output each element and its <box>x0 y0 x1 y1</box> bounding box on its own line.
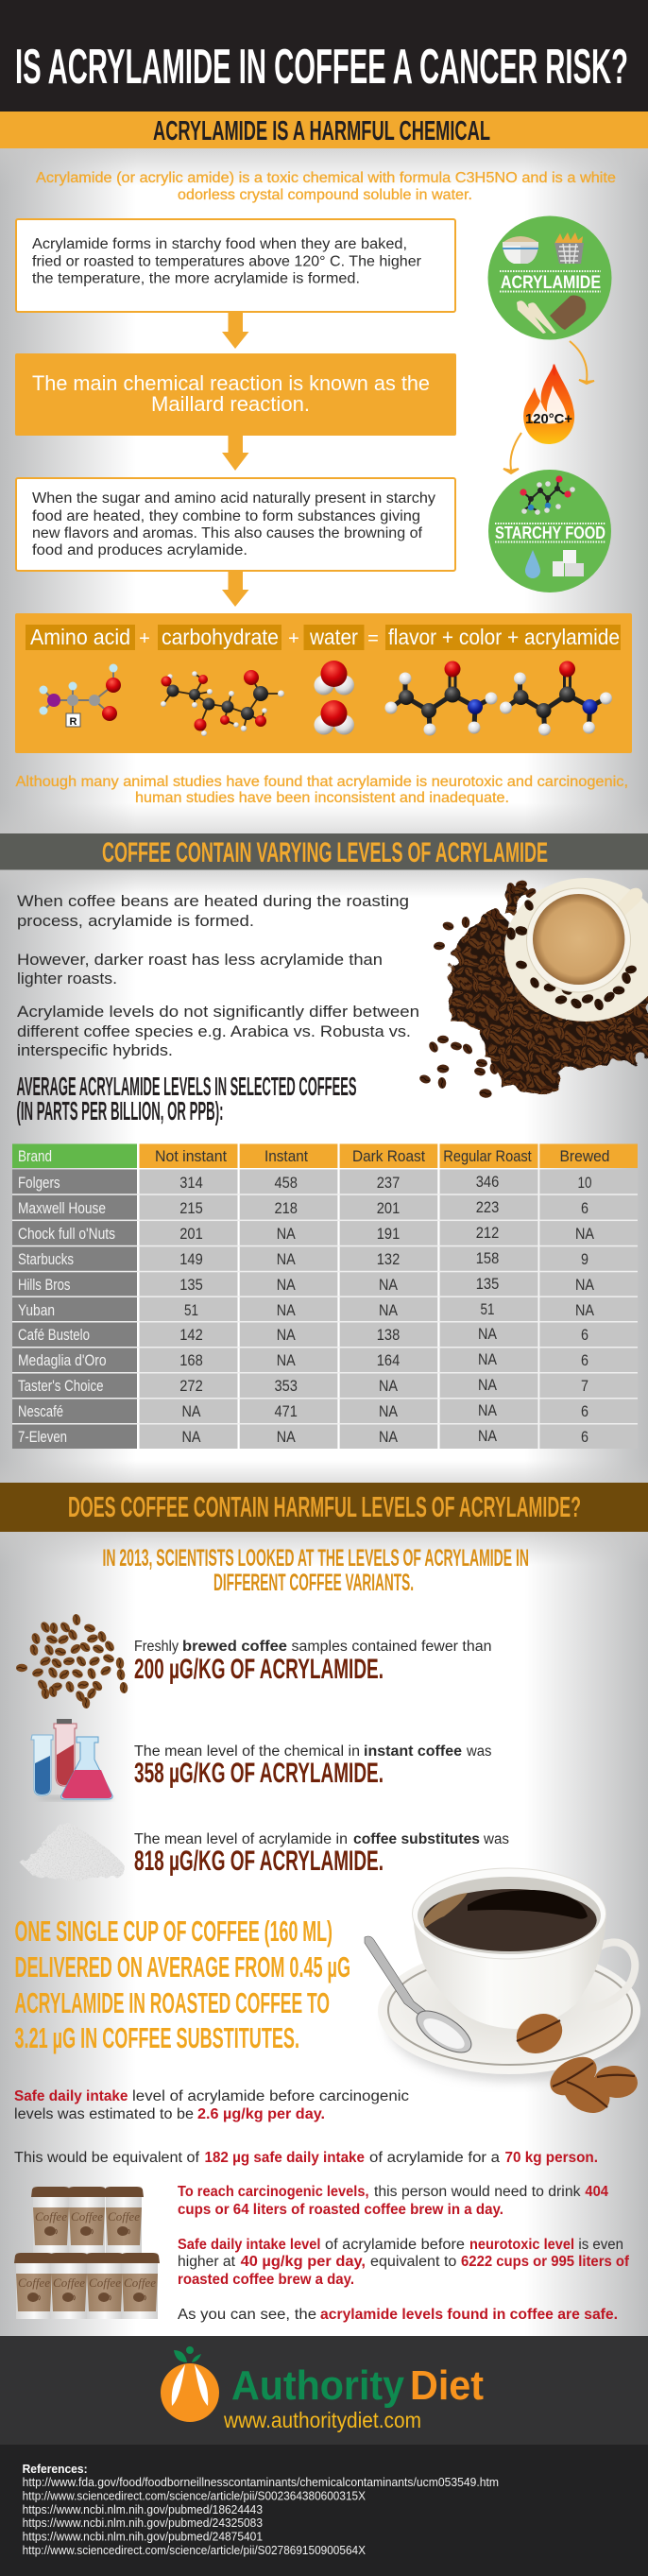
text box: how acrylamide forms: the temperature, the more acrylamide is formed. <box>32 270 360 287</box>
text: neurotoxic level: neurotoxic level <box>469 2237 574 2253</box>
subheading: 2013 study <box>102 1545 529 1596</box>
text: equivalent intake: of acrylamide for a <box>369 2150 500 2166</box>
row: Taster's Choice: NA <box>478 1376 498 1394</box>
text box: sugar and amino acid <box>16 478 455 571</box>
row: Starbucks: 132 <box>377 1250 400 1268</box>
callout: one cup of coffee: ONE SINGLE CUP OF COFFEE (160 ML) <box>15 1915 333 1948</box>
equation labels: + <box>139 628 150 649</box>
table header row: Brewed <box>559 1147 610 1165</box>
text: coffee substitutes stat <box>134 1831 509 1877</box>
label: acrylamide: ACRYLAMIDE <box>501 273 601 293</box>
row: Folgers: 346 <box>476 1173 499 1191</box>
text: coffee substitutes stat: coffee substitutes <box>353 1831 480 1847</box>
row: Nescafé: NA <box>181 1402 201 1420</box>
row: Taster's Choice: 353 <box>274 1377 298 1395</box>
row: Yuban: 51 <box>184 1301 198 1319</box>
row: Medaglia d'Oro <box>18 1350 588 1369</box>
text box: sugar and amino acid: new flavors and aromas. This also causes the browning of <box>32 525 423 541</box>
row: Hills Bros: 135 <box>476 1275 499 1293</box>
text block: roasting facts: interspecific hybrids. <box>17 1041 173 1059</box>
text: conclusion <box>178 2307 618 2323</box>
row: Maxwell House: 218 <box>274 1199 298 1217</box>
text: carcinogenic levels: this person would need to drink <box>374 2184 581 2200</box>
callout: one cup of coffee: ACRYLAMIDE IN ROASTED COFFEE TO <box>15 1986 330 2019</box>
text block: roasting facts: process, acrylamide is formed. <box>17 912 254 930</box>
row: 7-Eleven <box>18 1427 588 1446</box>
row: Medaglia d'Oro: NA <box>478 1350 498 1368</box>
row: Starbucks: 9 <box>581 1250 588 1268</box>
text box: sugar and amino acid: When the sugar and amino acid naturally present in starchy <box>32 490 435 507</box>
row: Maxwell House: 201 <box>377 1199 400 1217</box>
text: instant coffee stat: instant coffee <box>364 1743 462 1760</box>
row: Nescafé <box>18 1401 588 1420</box>
table header row: Instant <box>264 1147 308 1165</box>
section heading: acrylamide is a harmful chemical <box>0 112 648 148</box>
row: Medaglia d'Oro: NA <box>277 1351 296 1369</box>
text: safe daily intake <box>14 2088 409 2122</box>
icon: small molecule <box>520 475 575 515</box>
row: Maxwell House: 6 <box>581 1199 588 1217</box>
row: Medaglia d'Oro: 6 <box>581 1351 588 1369</box>
image: test tubes and flask <box>31 1719 113 1801</box>
closing note: animal and human studies <box>15 774 628 806</box>
molecule: amino acid <box>40 663 121 728</box>
row: Chock full o'Nuts: Chock full o'Nuts <box>18 1226 115 1243</box>
icon: bowl <box>503 236 538 264</box>
text: neurotoxic level: 40 µg/kg per day, <box>241 2254 366 2270</box>
text box: how acrylamide forms: fried or roasted to temperatures above 120° C. The higher <box>32 253 421 270</box>
text: brewed coffee stat <box>134 1639 491 1685</box>
molecule: water <box>314 661 354 735</box>
text block: roasting facts <box>17 892 419 1059</box>
row: Yuban: Yuban <box>18 1302 55 1319</box>
arrow down 1 <box>222 313 249 349</box>
text: neurotoxic level <box>178 2237 630 2288</box>
row: Hills Bros: 135 <box>179 1276 203 1294</box>
row: 7-Eleven: NA <box>277 1428 296 1446</box>
table header row: Brand <box>18 1148 52 1165</box>
footer: references: https://www.ncbi.nlm.nih.gov/pubmed/24325083 <box>23 2516 263 2530</box>
text: equivalent intake <box>14 2150 598 2166</box>
arrow: acrylamide to heat <box>570 341 594 384</box>
footer: logo band <box>0 2336 648 2445</box>
image: coffee bean cluster <box>16 1613 128 1709</box>
text: instant coffee stat: 358 µG/KG OF ACRYLAMIDE. <box>134 1758 384 1789</box>
row: Nescafé: 471 <box>274 1402 298 1420</box>
equation labels: flavor + color + acrylamide <box>388 625 620 649</box>
text: neurotoxic level: 6222 cups or 995 liters of <box>461 2254 630 2270</box>
text: brewed coffee stat: 200 µG/KG OF ACRYLAMIDE. <box>134 1654 384 1685</box>
row: Chock full o'Nuts: NA <box>575 1225 595 1243</box>
panel: Maillard reaction: The main chemical reaction is known as the <box>32 371 430 395</box>
table header row: Not instant <box>155 1147 227 1165</box>
text: instant coffee stat <box>134 1743 492 1789</box>
closing note: animal and human studies: human studies have been inconsistent and inadequate. <box>135 790 509 806</box>
row: Medaglia d'Oro: 168 <box>179 1351 203 1369</box>
footer: references <box>0 2445 648 2576</box>
row: Folgers: Folgers <box>18 1175 60 1192</box>
section heading: harmful levels <box>0 1483 648 1532</box>
text block: roasting facts: Acrylamide levels do not significantly differ between <box>17 1003 419 1021</box>
row: Chock full o'Nuts: NA <box>277 1225 296 1243</box>
footer: references: References: <box>23 2462 88 2476</box>
row: Folgers: 314 <box>179 1174 203 1192</box>
text box: sugar and amino acid: food and produces acrylamide. <box>32 542 247 558</box>
intro text: Acrylamide (or acrylic amide) is a toxic chemical with formula C3H5NO and is a white <box>36 170 616 186</box>
text block: roasting facts: lighter roasts. <box>17 970 117 987</box>
row: Taster's Choice: Taster's Choice <box>18 1378 104 1395</box>
text: neurotoxic level: of acrylamide before <box>325 2237 465 2253</box>
row: Café Bustelo: 138 <box>377 1326 400 1344</box>
text block: roasting facts: However, darker roast has less acrylamide than <box>17 951 383 969</box>
table: acrylamide levels by brand <box>12 1143 638 1449</box>
row: 7-Eleven: NA <box>181 1428 201 1446</box>
icon: fries <box>554 232 584 264</box>
intro text: odorless crystal compound soluble in water. <box>178 187 472 203</box>
equation labels: Amino acid <box>30 625 130 649</box>
callout: one cup of coffee <box>15 1915 350 2054</box>
row: Yuban: 51 <box>480 1300 495 1318</box>
icon: sugar cubes <box>553 550 584 576</box>
row: Café Bustelo: 142 <box>179 1326 203 1344</box>
molecule: amino acid: R <box>70 716 77 728</box>
row: 7-Eleven: 6 <box>581 1428 588 1446</box>
text: safe daily intake: Safe daily intake <box>14 2088 128 2104</box>
table header row: Dark Roast <box>352 1147 425 1165</box>
panel: reaction equation <box>15 613 632 753</box>
icon: flame 120C: 120°C+ <box>525 411 572 427</box>
row: Starbucks <box>18 1249 588 1268</box>
image: cup of black coffee with spoon and beans <box>365 1868 641 2121</box>
icon: starchy food circle <box>488 470 611 592</box>
row: Yuban: NA <box>575 1301 595 1319</box>
molecule: acrylamide left <box>385 661 497 735</box>
equation labels: water <box>309 625 358 649</box>
row: Café Bustelo: NA <box>478 1325 498 1343</box>
arrow down 2 <box>222 436 249 471</box>
row: Starbucks: NA <box>277 1250 296 1268</box>
row: Café Bustelo <box>18 1325 588 1344</box>
closing note: animal and human studies: Although many animal studies have found that acrylamide is neurotoxic and carcinogenic, <box>15 774 628 790</box>
row: Folgers: 237 <box>377 1174 400 1192</box>
table heading <box>17 1072 357 1125</box>
row: Taster's Choice: 7 <box>581 1377 588 1395</box>
text: conclusion: As you can see, the <box>178 2307 316 2323</box>
table header row: Regular Roast <box>443 1147 532 1165</box>
icon: orange logo <box>161 2346 219 2422</box>
label: starchy food: STARCHY FOOD <box>495 524 605 542</box>
text: carcinogenic levels: cups or 64 liters of roasted coffee brew in a day. <box>178 2202 503 2218</box>
row: Yuban: NA <box>379 1301 399 1319</box>
table heading: (IN PARTS PER BILLION, OR PPB): <box>17 1096 223 1125</box>
panel: Maillard reaction: Maillard reaction. <box>151 392 310 416</box>
equation labels: carbohydrate <box>162 625 279 649</box>
callout: one cup of coffee: 3.21 µG IN COFFEE SUBSTITUTES. <box>15 2021 299 2054</box>
text: equivalent intake: 182 µg safe daily intake <box>204 2150 365 2166</box>
row: Medaglia d'Oro: 164 <box>377 1351 400 1369</box>
row: Maxwell House: 223 <box>476 1198 499 1216</box>
equation labels: + <box>288 628 299 649</box>
equation labels: = <box>367 628 379 649</box>
text box: how acrylamide forms: Acrylamide forms in starchy food when they are baked, <box>32 236 407 252</box>
footer: references: http://www.sciencedirect.com/science/article/pii/S002364380600315X <box>23 2489 367 2502</box>
intro text <box>36 170 616 203</box>
icon: flame 120C <box>523 364 574 444</box>
row: Medaglia d'Oro: Medaglia d'Oro <box>18 1352 107 1369</box>
row: Café Bustelo: 6 <box>581 1326 588 1344</box>
row: Chock full o'Nuts: 201 <box>179 1225 203 1243</box>
text block: roasting facts: When coffee beans are heated during the roasting <box>17 892 409 910</box>
text: safe daily intake: levels was estimated to be <box>14 2106 194 2122</box>
text block: roasting facts: different coffee species e.g. Arabica vs. Robusta vs. <box>17 1022 411 1040</box>
row: Starbucks: 149 <box>179 1250 203 1268</box>
image: coffee cup and beans <box>418 878 648 1098</box>
row: Nescafé: NA <box>379 1402 399 1420</box>
icon: acrylamide circle <box>487 215 612 340</box>
text: neurotoxic level: roasted coffee brew a day. <box>178 2272 354 2288</box>
text: coffee substitutes stat: was <box>483 1831 509 1847</box>
row: Hills Bros <box>18 1275 595 1294</box>
image: stacked coffee cups <box>14 2187 160 2319</box>
subheading: 2013 study: DIFFERENT COFFEE VARIANTS. <box>213 1570 414 1596</box>
row: Yuban <box>18 1300 595 1319</box>
text: coffee substitutes stat: The mean level of acrylamide in <box>134 1831 348 1847</box>
image: powder pile <box>21 1823 126 1880</box>
text: safe daily intake: level of acrylamide before carcinogenic <box>132 2088 409 2104</box>
panel: Maillard reaction <box>15 353 456 436</box>
text: neurotoxic level: Safe daily intake level <box>178 2237 321 2253</box>
icon: parsnips <box>517 301 556 334</box>
row: Chock full o'Nuts <box>18 1224 595 1243</box>
row: Hills Bros: NA <box>575 1276 595 1294</box>
row: Folgers: 10 <box>578 1174 591 1192</box>
row: Hills Bros: NA <box>379 1276 399 1294</box>
text box: sugar and amino acid: food are heated, they combine to form substances giving <box>32 508 420 524</box>
footer: references: https://www.ncbi.nlm.nih.gov/pubmed/18624443 <box>23 2503 263 2516</box>
text: coffee substitutes stat: 818 µG/KG OF ACRYLAMIDE. <box>134 1846 384 1877</box>
equation labels <box>26 625 621 650</box>
row: Starbucks: 158 <box>476 1249 499 1267</box>
row: Nescafé: Nescafé <box>18 1403 63 1420</box>
molecule: carbohydrate <box>161 670 284 736</box>
row: Chock full o'Nuts: 191 <box>377 1225 400 1243</box>
row: Starbucks: Starbucks <box>18 1251 74 1268</box>
row: Folgers: 458 <box>274 1174 298 1192</box>
text: carcinogenic levels: To reach carcinogenic levels, <box>178 2184 368 2200</box>
text: brewed coffee stat: Freshly <box>134 1639 179 1655</box>
text box: how acrylamide forms <box>16 219 455 312</box>
text: equivalent intake: This would be equivalent of <box>14 2150 200 2166</box>
row: Maxwell House <box>18 1198 588 1217</box>
arrow down 3 <box>222 572 249 607</box>
website url: www.authoritydiet.com <box>223 2408 421 2432</box>
icon: water drop <box>525 550 540 578</box>
text: neurotoxic level: is even <box>578 2237 623 2253</box>
row: Taster's Choice: 272 <box>179 1377 203 1395</box>
footer: references: https://www.ncbi.nlm.nih.gov/pubmed/24875401 <box>23 2531 263 2544</box>
row: Café Bustelo: Café Bustelo <box>18 1327 90 1344</box>
text: equivalent intake: 70 kg person. <box>504 2150 598 2166</box>
wordmark: Diet <box>410 2362 484 2409</box>
title banner <box>0 0 648 112</box>
row: Nescafé: 6 <box>581 1402 588 1420</box>
text: instant coffee stat: The mean level of the chemical in <box>134 1743 360 1760</box>
row: Yuban: NA <box>277 1301 296 1319</box>
row: Chock full o'Nuts: 212 <box>476 1224 499 1242</box>
text: neurotoxic level: higher at <box>178 2254 236 2270</box>
row: Maxwell House: 215 <box>179 1199 203 1217</box>
text: safe daily intake: 2.6 µg/kg per day. <box>197 2106 325 2122</box>
row: Taster's Choice: NA <box>379 1377 399 1395</box>
row: Café Bustelo: NA <box>277 1326 296 1344</box>
wordmark: Authority <box>231 2362 404 2409</box>
text: instant coffee stat: was <box>466 1743 492 1760</box>
row: Maxwell House: Maxwell House <box>18 1200 106 1217</box>
row: 7-Eleven: 7-Eleven <box>18 1429 67 1446</box>
row: Nescafé: NA <box>478 1401 498 1419</box>
table cell backgrounds <box>12 1170 638 1449</box>
row: Hills Bros: Hills Bros <box>18 1277 70 1294</box>
row: 7-Eleven: NA <box>478 1427 498 1445</box>
callout: one cup of coffee: DELIVERED ON AVERAGE FROM 0.45 µG <box>15 1950 350 1984</box>
row: Hills Bros: NA <box>277 1276 296 1294</box>
row: Folgers <box>18 1173 591 1192</box>
table header row <box>12 1143 638 1168</box>
text: carcinogenic levels: 404 <box>585 2184 608 2200</box>
arrow: heat to starchy food <box>503 433 521 473</box>
row: 7-Eleven: NA <box>379 1428 399 1446</box>
text: conclusion: acrylamide levels found in coffee are safe. <box>320 2307 618 2323</box>
footer: references: http://www.sciencedirect.com/science/article/pii/S027869150900564X <box>23 2544 367 2557</box>
text: carcinogenic levels <box>178 2184 608 2218</box>
text: brewed coffee stat: brewed coffee <box>182 1639 287 1655</box>
icon: toast <box>550 296 586 330</box>
text: neurotoxic level: equivalent to <box>370 2254 456 2270</box>
molecule: acrylamide right <box>500 661 612 735</box>
row: Taster's Choice <box>18 1376 588 1395</box>
text: brewed coffee stat: samples contained fewer than <box>291 1639 491 1655</box>
footer: references: http://www.fda.gov/food/foodborneillnesscontaminants/chemicalcontaminants/ucm053549.htm <box>23 2476 499 2489</box>
